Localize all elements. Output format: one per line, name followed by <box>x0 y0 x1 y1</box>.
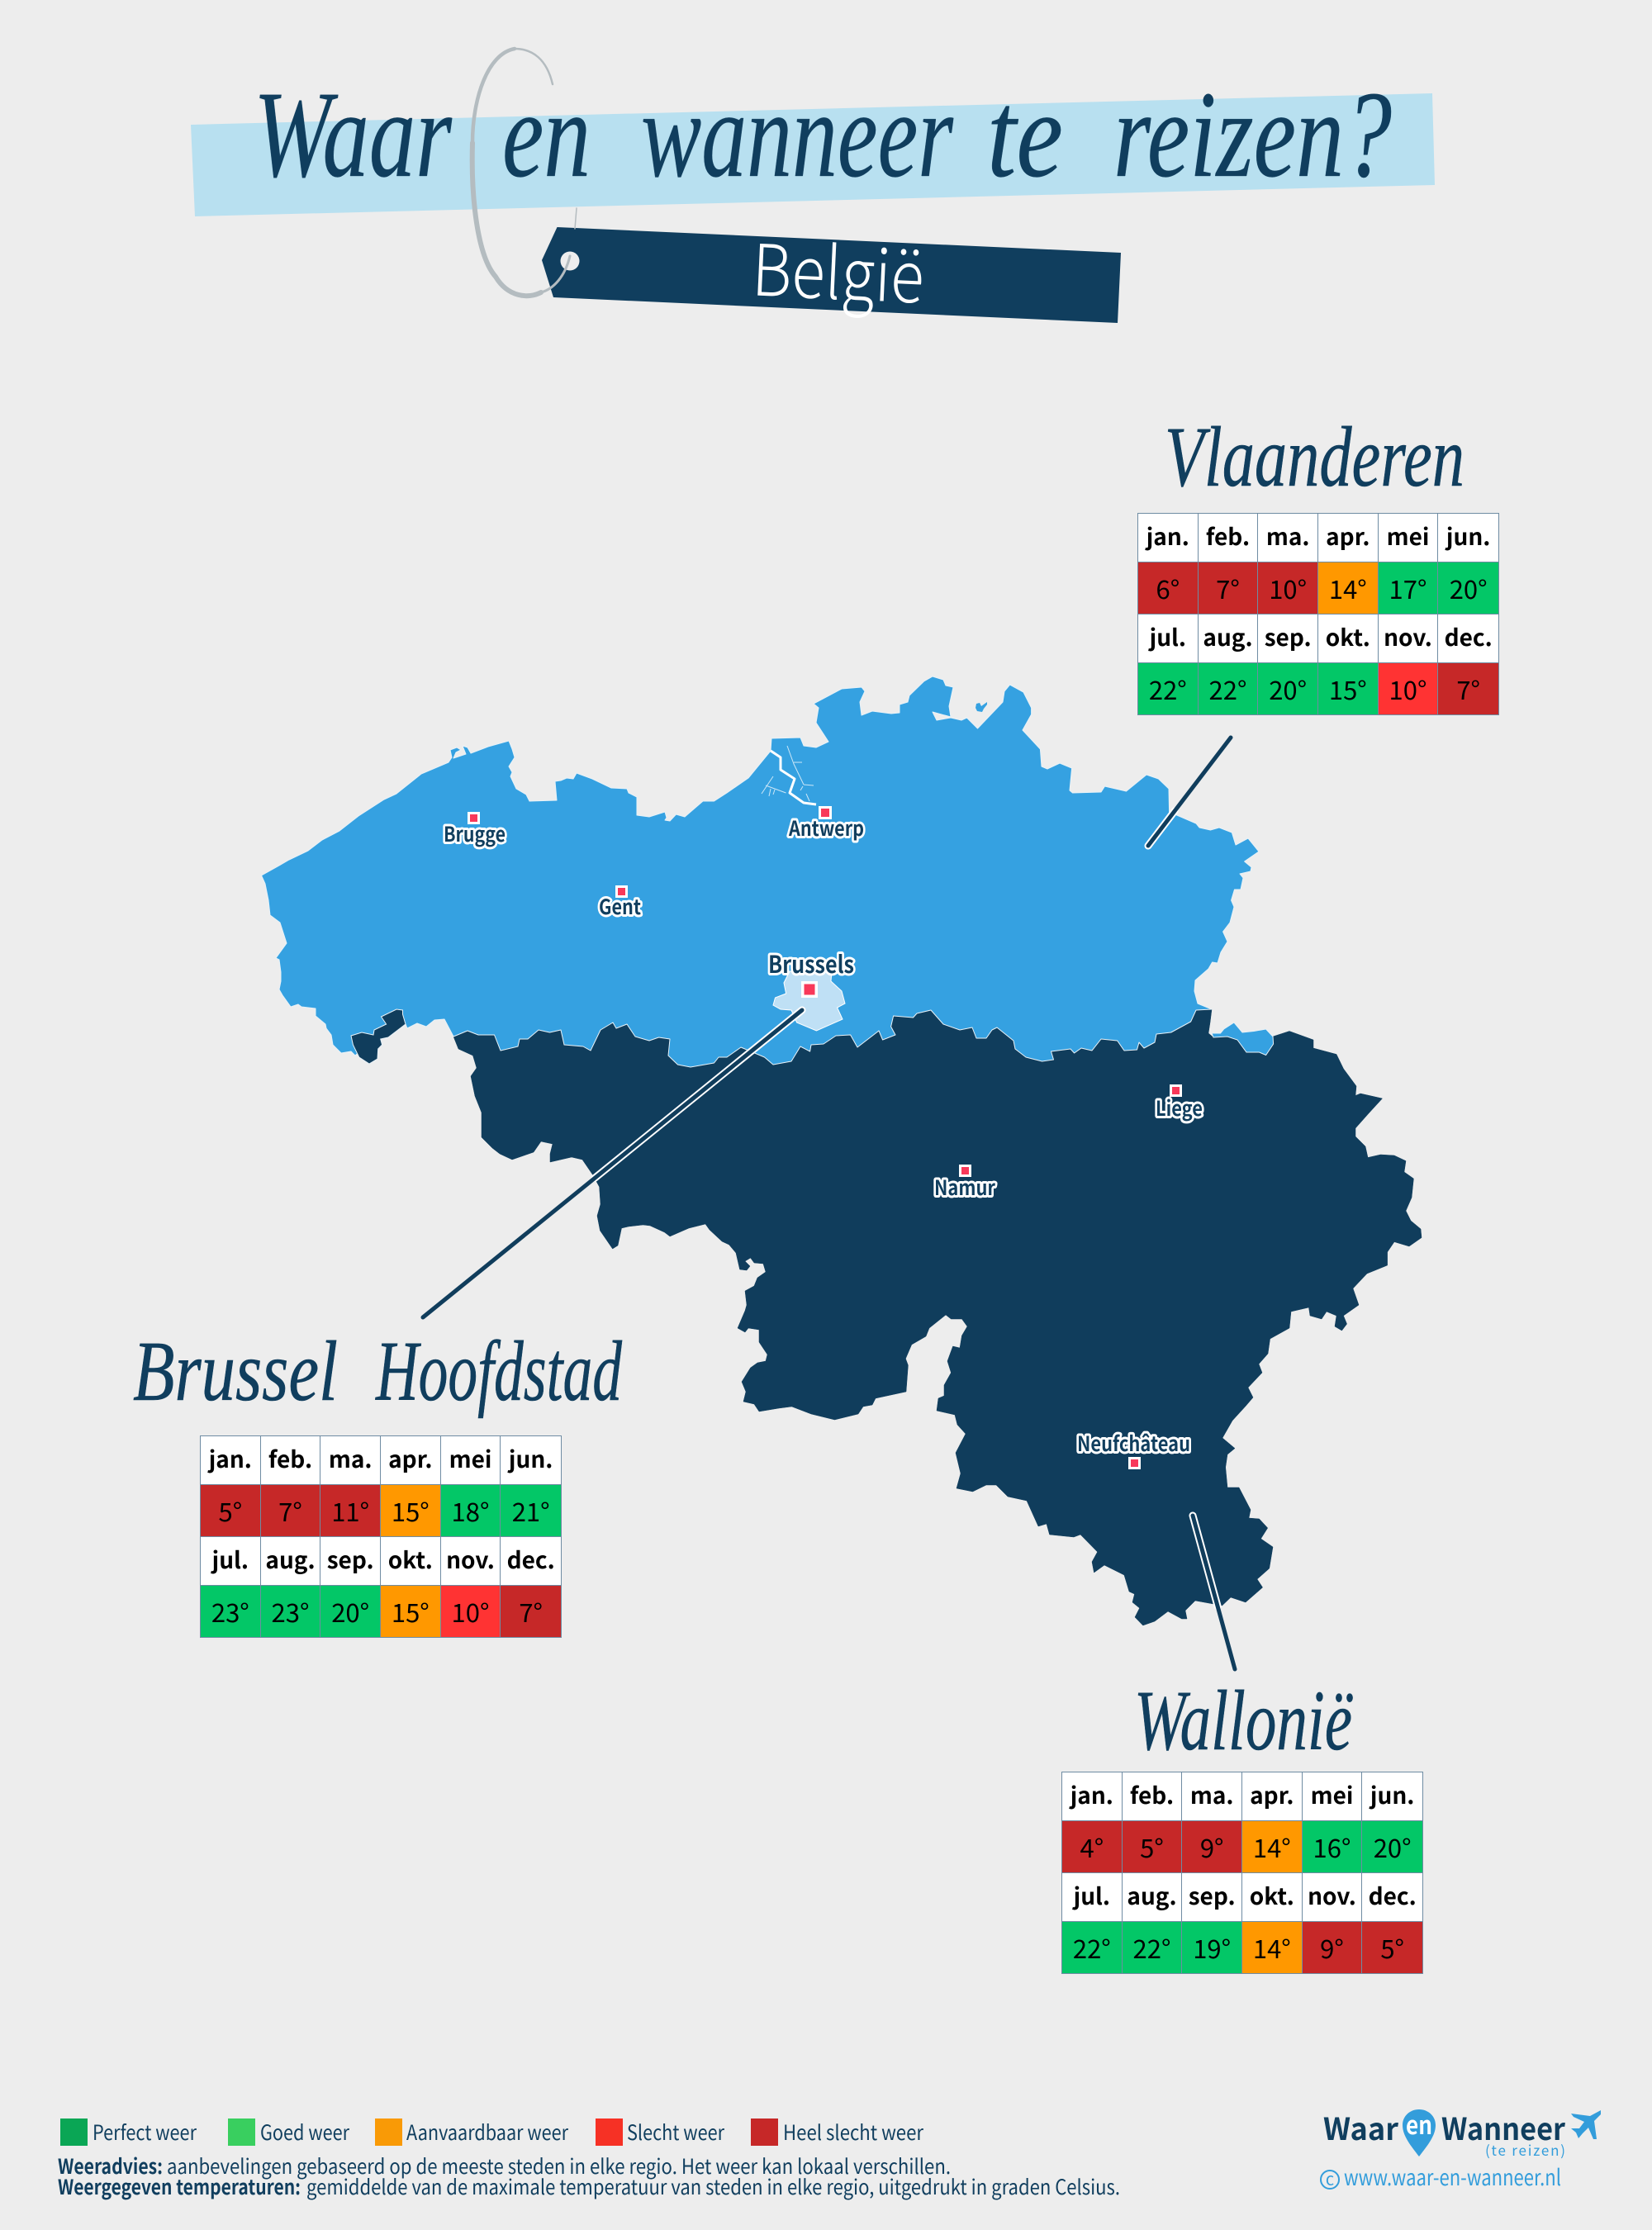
table: Brussel Hoofdstad: aug. <box>265 1543 316 1576</box>
logo: Waar en Wanneer: Wanneer <box>1441 2104 1566 2149</box>
city: Brugge: Brugge <box>444 818 506 848</box>
logo: Waar en Wanneer <box>1323 2104 1601 2160</box>
city: Brussels <box>768 946 854 998</box>
table: Brussel Hoofdstad: 20° <box>331 1592 369 1629</box>
table: Wallonië: 9° <box>1320 1928 1344 1966</box>
legend: Perfect weer <box>93 2117 197 2147</box>
table: Brussel Hoofdstad: 21° <box>512 1492 550 1528</box>
map of Belgium <box>261 676 1422 1669</box>
table: Vlaanderen: 10° <box>1389 669 1427 707</box>
table: Wallonië: jul. <box>1074 1878 1110 1911</box>
tag string loop <box>472 49 577 296</box>
region: Wallonie <box>453 1009 1422 1625</box>
table: Wallonië: sep. <box>1189 1878 1236 1911</box>
table: Wallonië: apr. <box>1250 1777 1294 1810</box>
heading: Brussel Hoofdstad: Hoofdstad <box>375 1324 623 1419</box>
table: Vlaanderen: 20° <box>1450 568 1488 606</box>
table: Wallonië: dec. <box>1369 1878 1417 1911</box>
region: Voeren exclave <box>1212 1022 1274 1056</box>
icon: location pin <box>1403 2109 1436 2156</box>
legend: Slecht weer <box>627 2117 724 2147</box>
table: Vlaanderen: mei <box>1387 519 1429 552</box>
table: Wallonië: 4° <box>1080 1827 1104 1865</box>
table: Brussel Hoofdstad: 18° <box>452 1492 489 1528</box>
table: Brussel Hoofdstad: 7° <box>278 1492 302 1528</box>
region: Comines exclave <box>351 1009 406 1064</box>
table: Vlaanderen: 7° <box>1456 669 1480 707</box>
table: Wallonië: 16° <box>1313 1827 1351 1865</box>
title: te <box>987 66 1063 203</box>
table: Wallonië <box>1061 1772 1423 1974</box>
title: wanneer <box>641 66 953 203</box>
table: Brussel Hoofdstad: 15° <box>392 1592 430 1629</box>
table: Wallonië: 19° <box>1193 1928 1231 1966</box>
logo: Waar en Wanneer: Waar <box>1323 2104 1399 2149</box>
table: Brussel Hoofdstad: 5° <box>218 1492 242 1528</box>
table: Brussel Hoofdstad: okt. <box>388 1543 433 1576</box>
table: Brussel Hoofdstad: feb. <box>268 1442 312 1475</box>
table: Wallonië: mei <box>1311 1777 1353 1810</box>
table: Vlaanderen: sep. <box>1265 619 1312 652</box>
table: Brussel Hoofdstad: jul. <box>212 1543 249 1576</box>
title <box>254 66 1392 203</box>
table: Vlaanderen: 22° <box>1149 669 1187 707</box>
heading: Brussel Hoofdstad: Brussel <box>133 1324 338 1419</box>
legend <box>60 2117 923 2147</box>
table: Wallonië: feb. <box>1130 1777 1174 1810</box>
logo: Waar en Wanneer: (te reizen) <box>1485 2139 1565 2160</box>
table: Brussel Hoofdstad: 10° <box>452 1592 489 1629</box>
table: Wallonië: nov. <box>1308 1878 1356 1911</box>
tag: België <box>542 212 1121 324</box>
table: Vlaanderen: ma. <box>1266 519 1309 552</box>
table: Vlaanderen: feb. <box>1206 519 1250 552</box>
website credit: c <box>1326 2166 1334 2190</box>
table: Vlaanderen: 15° <box>1329 669 1367 707</box>
table: Brussel Hoofdstad: mei <box>449 1442 491 1475</box>
table: Wallonië: 14° <box>1253 1928 1291 1966</box>
table: Brussel Hoofdstad: nov. <box>446 1543 495 1576</box>
table: Brussel Hoofdstad: 15° <box>392 1492 430 1528</box>
table: Vlaanderen: 6° <box>1156 568 1180 606</box>
logo: Waar en Wanneer: en <box>1406 2105 1432 2142</box>
city: Namur: Namur <box>934 1172 995 1202</box>
island near Baarle <box>976 702 987 712</box>
Scheldt river and harbour lines <box>762 746 816 804</box>
tag: België: België <box>750 212 927 324</box>
table: Brussel Hoofdstad: sep. <box>327 1543 374 1576</box>
table: Vlaanderen: 17° <box>1389 568 1427 606</box>
table: Brussel Hoofdstad: apr. <box>388 1442 433 1475</box>
table: Vlaanderen: nov. <box>1384 619 1432 652</box>
table: Wallonië: ma. <box>1190 1777 1233 1810</box>
table: Vlaanderen: 7° <box>1216 568 1240 606</box>
legend: Heel slecht weer <box>783 2117 923 2147</box>
title: Waar <box>254 66 452 203</box>
heading: Wallonië: Wallonië <box>1134 1673 1353 1768</box>
note: temperatures <box>58 2171 1120 2201</box>
table: Vlaanderen: dec. <box>1445 619 1493 652</box>
table: Wallonië: 20° <box>1374 1827 1412 1865</box>
table: Wallonië: 5° <box>1380 1928 1404 1966</box>
connector: Wallonie <box>1193 1516 1235 1669</box>
heading: Brussel Hoofdstad <box>133 1324 623 1419</box>
table: Vlaanderen: 14° <box>1329 568 1367 606</box>
table: Wallonië: 22° <box>1073 1928 1111 1966</box>
table: Brussel Hoofdstad: 23° <box>272 1592 309 1629</box>
table: Vlaanderen: jan. <box>1146 519 1189 552</box>
table: Brussel Hoofdstad: jun. <box>509 1442 553 1475</box>
connector: Brussel <box>423 1010 802 1317</box>
table: Brussel Hoofdstad: dec. <box>507 1543 555 1576</box>
icon: airplane <box>1571 2110 1601 2139</box>
table: Vlaanderen <box>1137 513 1499 715</box>
table: Brussel Hoofdstad: 23° <box>211 1592 249 1629</box>
table: Wallonië: 22° <box>1133 1928 1170 1966</box>
table: Brussel Hoofdstad: 7° <box>519 1592 543 1629</box>
table: Vlaanderen: 22° <box>1209 669 1246 707</box>
city: Liege: Liege <box>1156 1093 1203 1122</box>
city: Gent: Gent <box>599 891 641 921</box>
note: weather advice: Weeradvies: <box>58 2151 163 2180</box>
table: Vlaanderen: 20° <box>1269 669 1307 707</box>
note: temperatures: gemiddelde van de maximale temperatuur van steden in elke regio, uitgedrukt in graden Celsius. <box>306 2171 1120 2201</box>
table: Vlaanderen: apr. <box>1326 519 1370 552</box>
note: temperatures: Weergegeven temperaturen: <box>58 2171 301 2201</box>
heading: Vlaanderen: Vlaanderen <box>1165 410 1464 505</box>
region: Brussel <box>773 971 845 1031</box>
table: Wallonië: jan. <box>1070 1777 1113 1810</box>
legend: Goed weer <box>260 2117 349 2147</box>
legend: Aanvaardbaar weer <box>406 2117 568 2147</box>
region: Vlaanderen <box>261 676 1259 1067</box>
table: Wallonië: 9° <box>1200 1827 1224 1865</box>
city: Neufchâteau <box>1077 1428 1190 1469</box>
table: Vlaanderen: jul. <box>1150 619 1186 652</box>
connector: Vlaanderen <box>1148 738 1231 846</box>
table: Wallonië: 14° <box>1253 1827 1291 1865</box>
table: Vlaanderen: aug. <box>1203 619 1253 652</box>
note: weather advice: aanbevelingen gebaseerd op de meeste steden in elke regio. Het weer kan lokaal verschillen. <box>167 2151 951 2180</box>
table: Wallonië: aug. <box>1127 1878 1177 1911</box>
title: reizen? <box>1113 66 1392 203</box>
title: en <box>502 66 591 203</box>
table: Brussel Hoofdstad: 11° <box>331 1492 369 1528</box>
website credit: www.waar-en-wanneer.nl <box>1344 2160 1561 2192</box>
table: Vlaanderen: jun. <box>1446 519 1490 552</box>
table: Vlaanderen: 10° <box>1269 568 1307 606</box>
table: Vlaanderen: okt. <box>1326 619 1370 652</box>
table: Wallonië: 5° <box>1140 1827 1164 1865</box>
table: Brussel Hoofdstad <box>200 1435 562 1638</box>
table: Brussel Hoofdstad: ma. <box>329 1442 372 1475</box>
city: Antwerp: Antwerp <box>788 813 864 842</box>
city: Brussels: Brussels <box>768 946 854 980</box>
table: Wallonië: jun. <box>1370 1777 1414 1810</box>
city: Neufchâteau: Neufchâteau <box>1077 1428 1190 1458</box>
table: Brussel Hoofdstad: jan. <box>209 1442 252 1475</box>
title banner band <box>191 93 1435 216</box>
table: Wallonië: okt. <box>1250 1878 1294 1911</box>
